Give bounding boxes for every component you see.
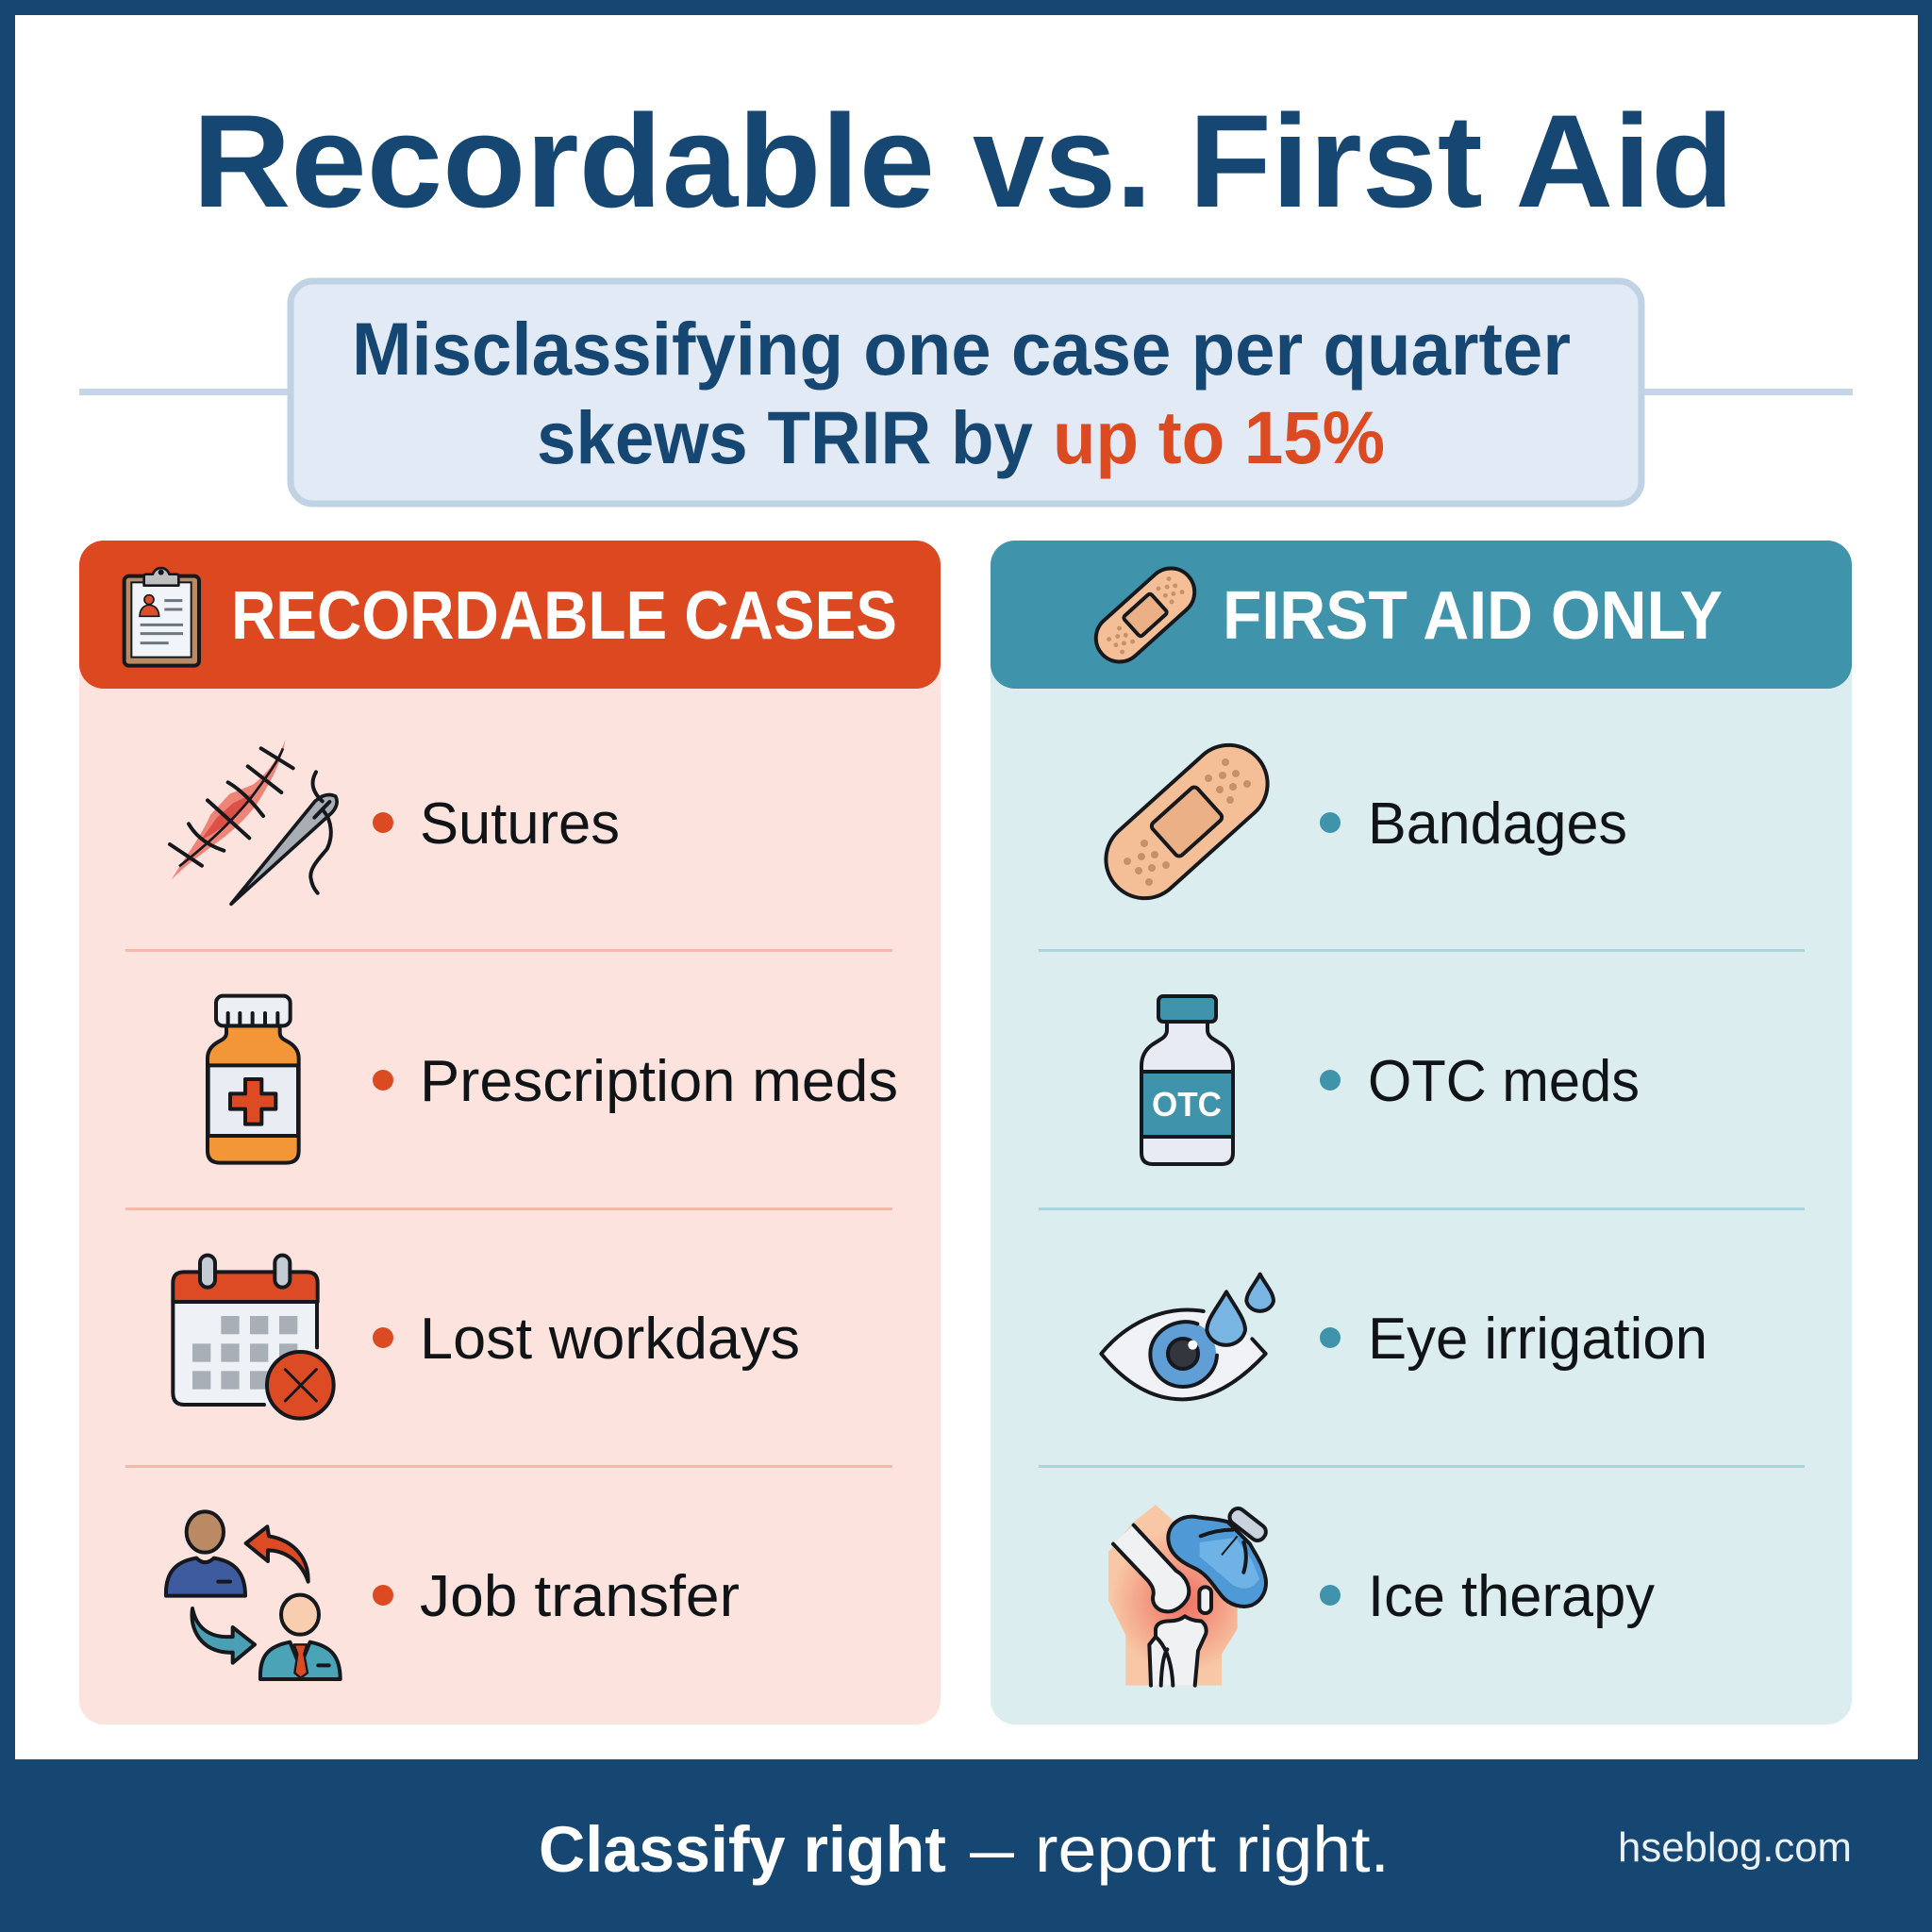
- item label: eye irrigation: Eye irrigation: [1368, 1307, 1707, 1372]
- bullets: first aid: [1320, 812, 1341, 1606]
- icon: sutures and needle: [170, 739, 337, 904]
- panel: recordable cases: [79, 541, 941, 1724]
- title: [192, 87, 1734, 235]
- title: Recordable: [192, 87, 935, 235]
- item label: ice therapy: Ice therapy: [1368, 1564, 1655, 1629]
- title: First Aid: [1189, 87, 1734, 235]
- footer message: —: [970, 1813, 1014, 1886]
- callout: misclassification impact: [291, 281, 1641, 504]
- icon: calendar with cross: [173, 1256, 334, 1419]
- callout: misclassification impact: up to 15%: [1053, 395, 1385, 479]
- panel header: recordable cases: [79, 541, 941, 689]
- icon: job transfer: [166, 1511, 341, 1679]
- item label: job transfer: Job transfer: [420, 1564, 740, 1629]
- header label: recordable cases: RECORDABLE CASES: [231, 578, 897, 654]
- title: vs.: [973, 87, 1152, 235]
- icon: clipboard: [125, 568, 199, 666]
- panel header: first aid only: [991, 541, 1852, 689]
- item label: sutures: Sutures: [420, 791, 620, 857]
- row divider: [1039, 949, 1805, 952]
- icon: eye with drops: [1101, 1274, 1274, 1399]
- item label: otc meds: OTC meds: [1368, 1049, 1640, 1114]
- item label: bandages: Bandages: [1368, 791, 1627, 857]
- header label: first aid only: FIRST AID ONLY: [1223, 578, 1723, 654]
- callout: misclassification impact: skews TRIR by: [537, 395, 1033, 479]
- footer source: hseblog.com: [1618, 1824, 1852, 1871]
- footer message: report right.: [1035, 1813, 1390, 1886]
- item label: lost workdays: Lost workdays: [420, 1307, 800, 1372]
- callout: misclassification impact: Misclassifying one case per quarter: [352, 307, 1571, 391]
- bullet: sutures: [373, 812, 393, 1606]
- icon: prescription bottle: [208, 996, 299, 1163]
- icon: OTC bottle: [1141, 996, 1233, 1164]
- panel: first aid only: [991, 541, 1852, 1724]
- icon: small bandage: [1086, 558, 1205, 672]
- footer message: [539, 1813, 1390, 1886]
- row divider: [125, 949, 892, 952]
- icon: bandage: [1091, 729, 1283, 914]
- icon: OTC bottle: OTC: [1152, 1085, 1222, 1124]
- icon: ice pack on knee: [1108, 1505, 1269, 1686]
- item label: prescription meds: Prescription meds: [420, 1049, 898, 1114]
- footer message: Classify right: [539, 1813, 946, 1886]
- callout rule: [79, 389, 1853, 395]
